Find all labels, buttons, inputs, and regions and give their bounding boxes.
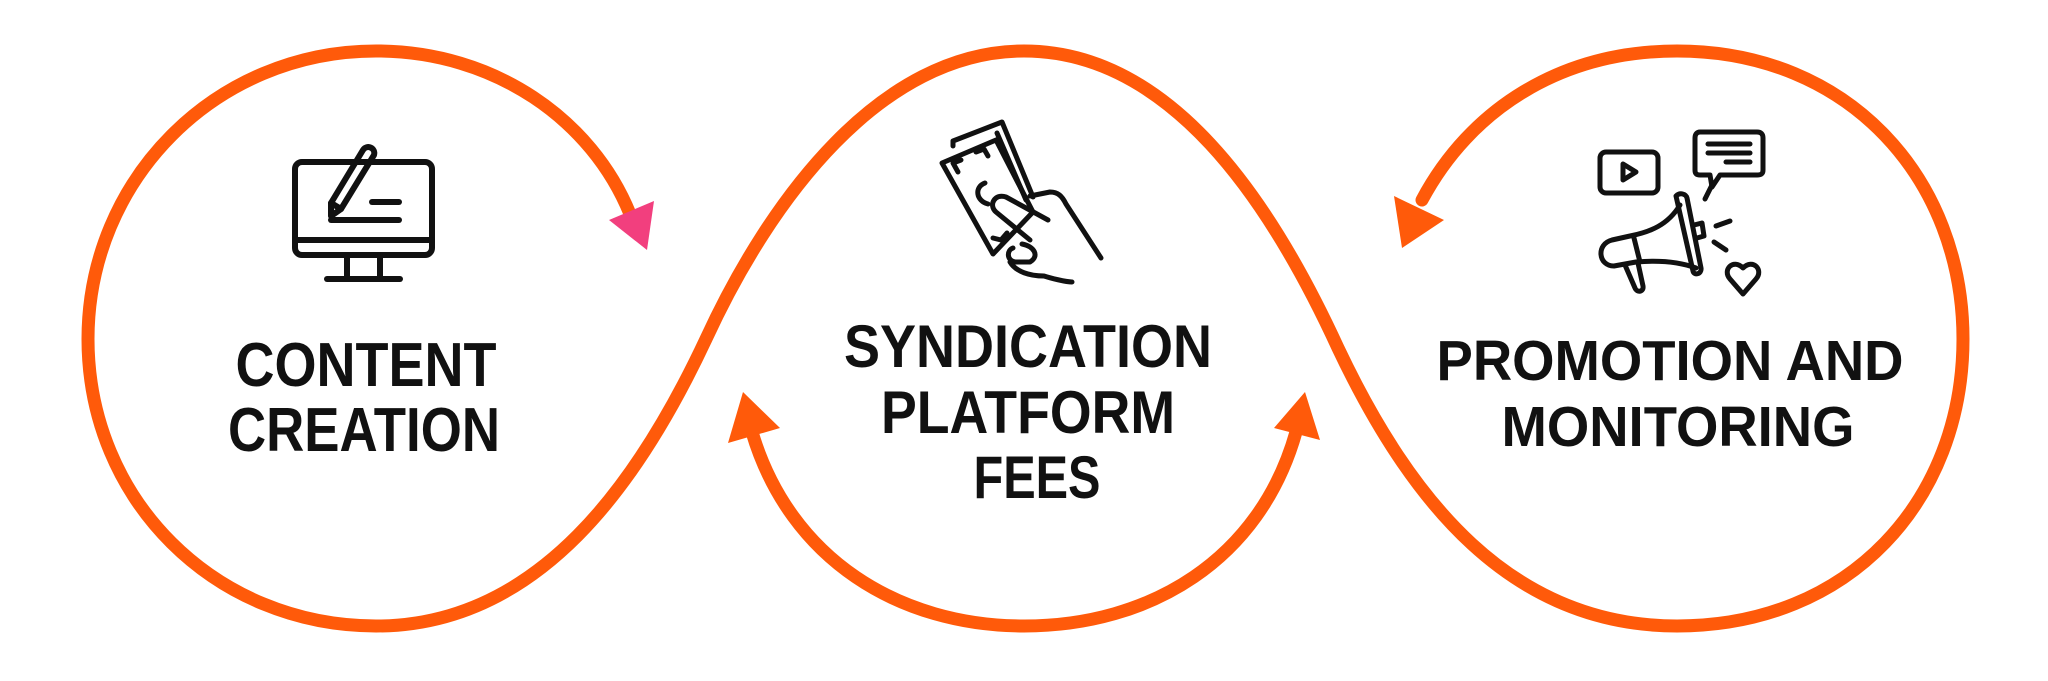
label: syndication platform fees: PLATFORM [881,379,1175,446]
label: syndication platform fees [844,313,1212,511]
icon: cash in hand [942,122,1101,282]
main infinity loop path [88,51,1963,626]
arrow: right lobe pointing left [1394,196,1444,248]
label: syndication platform fees: FEES [974,444,1100,511]
label: content creation: CONTENT [236,331,497,400]
label: content creation [228,331,500,465]
label: promotion and monitoring: PROMOTION AND [1436,329,1904,393]
label: promotion and monitoring [1436,329,1904,459]
arrow: bottom arc left end [728,392,780,443]
label: content creation: CREATION [228,396,500,465]
arrow: pink into middle [609,201,654,250]
icon: megaphone with social [1600,132,1763,294]
label: syndication platform fees: SYNDICATION [844,313,1212,380]
bottom middle arc [752,432,1296,626]
label: promotion and monitoring: MONITORING [1502,395,1854,459]
icon: monitor with pencil [295,147,432,279]
arrow: bottom arc right end [1274,392,1320,440]
